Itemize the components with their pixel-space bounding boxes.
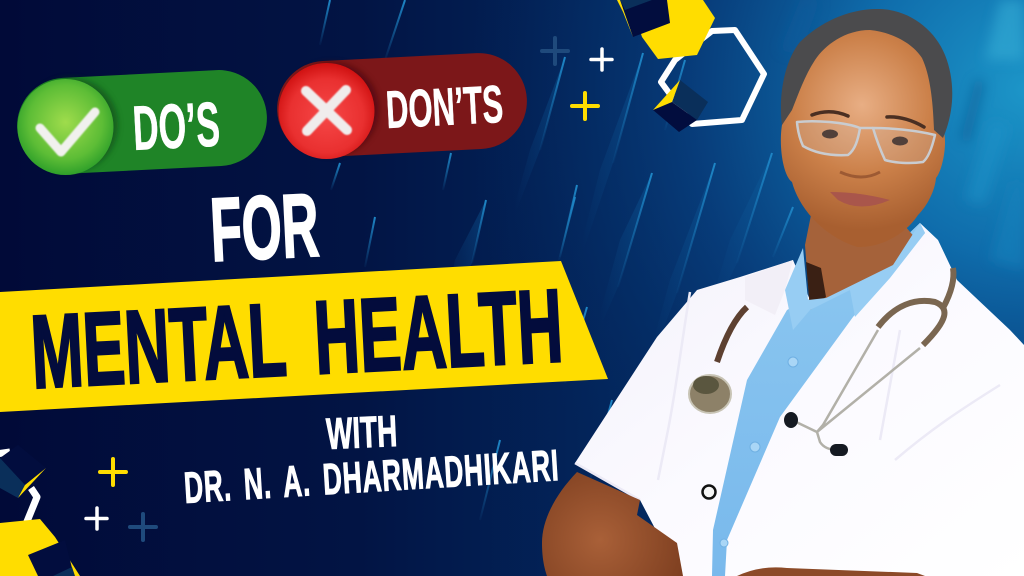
lab coat [575, 223, 1024, 576]
top cube [617, 0, 670, 37]
white hexagon outline [661, 30, 764, 124]
banner text: MENTAL HEALTH [28, 268, 565, 411]
lower cube [28, 540, 75, 576]
decoration: top hexagon and cubes [617, 0, 764, 132]
coat button [702, 486, 716, 498]
circle shadow [24, 78, 118, 172]
badge: don'ts [275, 51, 529, 159]
eyebrows [812, 112, 924, 127]
coat collar [745, 260, 793, 315]
upper cube [0, 445, 46, 498]
do's label: DO’S [131, 89, 222, 164]
icon: red cross circle [278, 63, 374, 159]
text: doctor name: DR. N. A. DHARMADHIKARI [183, 440, 560, 513]
smile [830, 192, 890, 206]
red circle shadow [285, 62, 379, 156]
stethoscope [689, 268, 953, 456]
ear tips [784, 412, 848, 456]
head [781, 18, 945, 247]
yellow hexagon [630, 0, 715, 59]
shirt buttons [720, 357, 798, 547]
decoration: bottom plus signs [86, 459, 156, 540]
banner: mental health [0, 261, 608, 412]
shirt [712, 223, 925, 576]
nose [840, 172, 880, 177]
neck shadow [806, 262, 826, 308]
glasses [797, 121, 935, 163]
white hexagon outline [0, 452, 37, 524]
eyes [822, 130, 908, 146]
text: with: WITH [325, 406, 398, 459]
yellow banner [0, 261, 608, 412]
icon: green check circle [18, 79, 114, 175]
chest piece [689, 375, 731, 413]
hair [781, 9, 952, 138]
don'ts pill [275, 51, 529, 159]
coat fold lines [575, 292, 1000, 500]
decoration: bottom-left shapes [0, 445, 80, 576]
doctor portrait [542, 9, 1024, 576]
arm [542, 472, 683, 576]
badge: do's [15, 68, 269, 176]
heading: for: FOR [208, 175, 321, 281]
do's pill [15, 68, 269, 176]
decoration: top plus signs [542, 38, 612, 119]
neck [805, 195, 917, 310]
hand [737, 567, 925, 576]
don'ts label: DON’TS [385, 76, 505, 140]
yellow hexagon [0, 519, 80, 576]
shirt collar [785, 223, 925, 330]
lower cube [653, 80, 708, 132]
